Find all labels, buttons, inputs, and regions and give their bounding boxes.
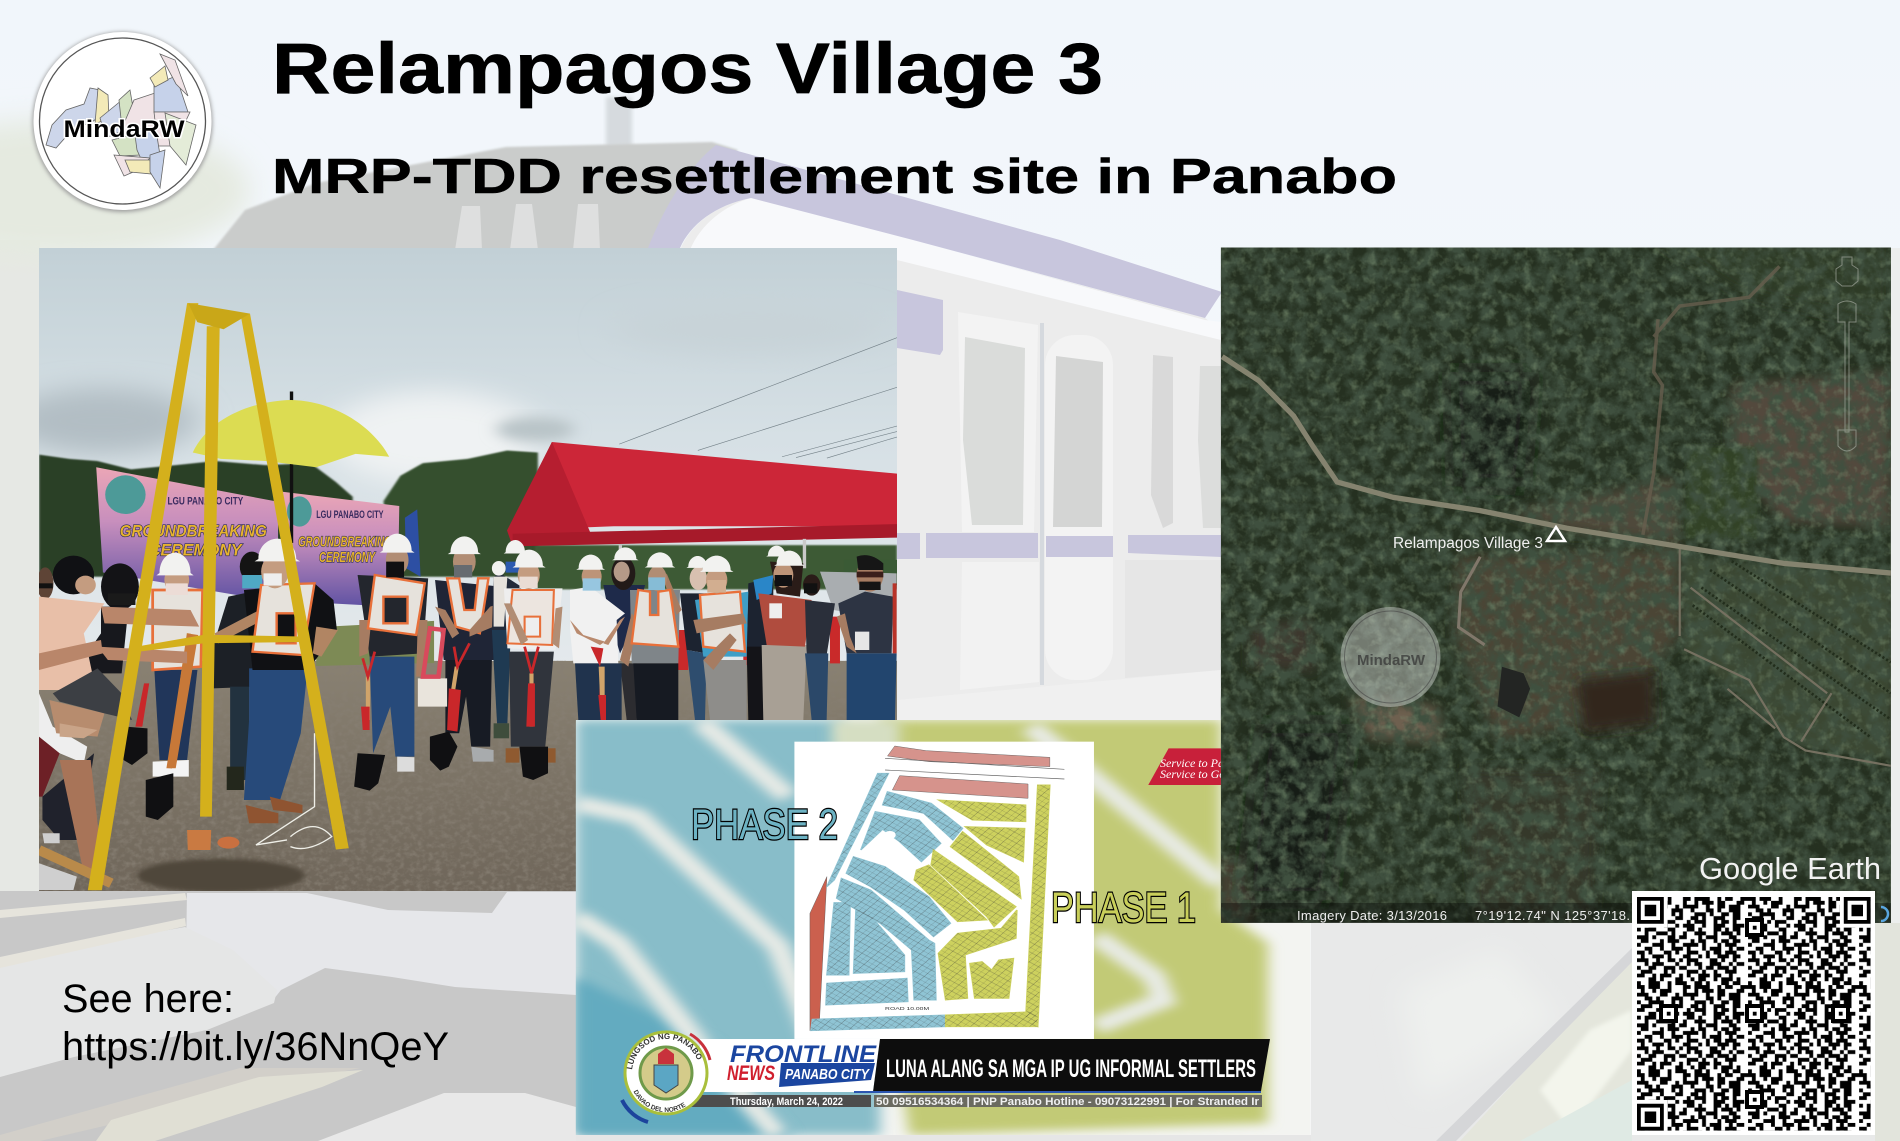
Google Earth wordmark: Google Earth <box>1699 851 1881 886</box>
title: Relampagos Village 3 <box>272 30 1103 109</box>
service sign lettering: Service to God <box>1160 767 1232 781</box>
subtitle: MRP-TDD resettlement site in Panabo <box>272 150 1397 204</box>
panel: resettlement site plan composite <box>576 720 1311 1135</box>
attendee at left of tripod <box>154 670 197 760</box>
call to action link: See here: <box>62 977 234 1021</box>
red service sign <box>1148 748 1221 785</box>
news ticker lower third <box>689 1039 1270 1108</box>
photo scenery: GROUNDBREAKING <box>120 522 267 541</box>
photo scenery: CEREMONY <box>319 548 376 565</box>
photo scenery: CEREMONY <box>149 541 243 560</box>
site label: Relampagos Village 3 <box>1393 535 1543 552</box>
ticker white plate <box>700 1039 880 1092</box>
ticker black headline band <box>873 1039 1270 1092</box>
attendee in white shirt with vest <box>509 652 554 747</box>
status bar help icon <box>1881 907 1888 921</box>
blue Panabo City tag <box>779 1063 875 1087</box>
photo scenery: GROUNDBREAKING <box>298 533 391 550</box>
site plan drawing: ROAD 10.00M <box>885 1007 929 1012</box>
small pipe pieces <box>187 830 211 850</box>
panel: groundbreaking ceremony photo <box>8 248 897 892</box>
attendee beside left shovel <box>370 657 414 757</box>
attendee in blue shirt <box>695 592 748 657</box>
QR code <box>1632 891 1875 1135</box>
photo scenery: LGU PANABO CITY <box>167 494 243 507</box>
logo map of Mindanao regions <box>46 54 196 188</box>
shovels <box>170 633 531 768</box>
program name: News: NEWS <box>727 1062 775 1085</box>
call to action link: https://bit.ly/36NnQeY <box>62 1025 449 1069</box>
service sign lettering: Service to Panabo <box>1160 756 1248 770</box>
satellite watermark badge: MindaRW <box>1357 652 1426 669</box>
logo: MindaRW circular badge <box>32 32 212 212</box>
service sign lettering <box>1160 760 1221 778</box>
seal of Panabo City <box>620 1030 712 1124</box>
white post and red chair <box>418 678 447 707</box>
blurred site plan backdrop <box>576 720 1311 1135</box>
date text: Thursday, March 24, 2022 <box>730 1096 843 1108</box>
tag text: PANABO CITY <box>785 1066 871 1083</box>
QR finder markers <box>1637 897 1871 1131</box>
label: Phase 1: PHASE 1 <box>1051 884 1196 932</box>
attendee in navy polo with vest <box>445 660 492 747</box>
yellow tripod <box>88 303 349 890</box>
attendee in red top <box>762 645 807 720</box>
logo wordmark: MindaRW <box>64 116 185 143</box>
Street View navigation outlines <box>1836 257 1858 451</box>
attendee in pink shirt <box>101 563 139 610</box>
imagery status bar: Imagery Date: 3/13/2016 <box>1297 908 1447 923</box>
label: Phase 2: PHASE 2 <box>691 801 838 849</box>
attendee in grey shirt <box>630 590 680 663</box>
seal of Panabo City: LUNGSOD NG PANABO <box>626 1033 702 1070</box>
program name: Frontline: FRONTLINE <box>730 1041 877 1068</box>
attendee with black shirt <box>244 668 308 800</box>
imagery status bar <box>1221 903 1891 923</box>
attendee in navy polo <box>838 592 893 653</box>
headline text: LUNA ALANG SA MGA IP UG INFORMAL SETTLERS <box>886 1055 1256 1083</box>
rope coil <box>256 733 332 849</box>
hotline bar <box>874 1095 1262 1107</box>
satellite watermark badge <box>1340 607 1440 707</box>
call to action link <box>62 977 449 1069</box>
back attendee with blue mask <box>214 593 252 688</box>
photo scenery: LGU PANABO CITY <box>316 508 384 520</box>
left-hand attendees <box>37 534 562 890</box>
back attendee with blue mask at right <box>492 573 521 633</box>
attendee in dark jacket <box>805 600 835 655</box>
seal of Panabo City: DAVAO DEL NORTE <box>634 1090 686 1112</box>
crouching attendee with cap <box>42 753 94 840</box>
satellite imagery <box>1220 240 1891 923</box>
site marker triangle <box>1547 527 1565 541</box>
orange pipe <box>166 633 198 768</box>
site plan drawing <box>794 742 1094 1039</box>
attendee in white polo <box>570 587 625 663</box>
date bar <box>689 1095 871 1107</box>
hotline text: 50 09516534364 | PNP Panabo Hotline - 09073122991 | For Stranded Ir <box>876 1096 1260 1108</box>
photo scenery <box>8 248 897 892</box>
ticker blue rule <box>854 1091 1261 1093</box>
imagery status bar: 7°19'12.74" N 125°37'18. <box>1475 908 1630 923</box>
panel: satellite map <box>1220 240 1891 923</box>
right-hand attendees <box>570 546 897 720</box>
